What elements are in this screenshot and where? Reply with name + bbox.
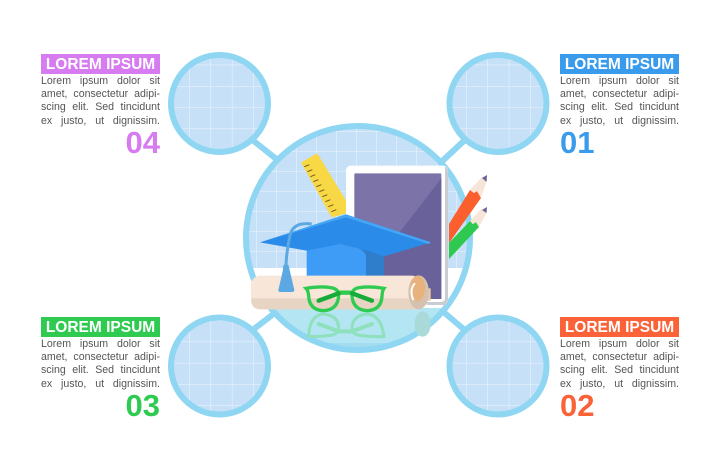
body text 02	[560, 338, 679, 390]
number 03: 03	[126, 388, 160, 423]
body text 02: scing elit. Sed tincidunt	[560, 364, 679, 376]
icon: tablet	[346, 166, 448, 305]
icon: tassel	[278, 264, 294, 292]
glasses reflection	[309, 314, 384, 337]
circle 03	[171, 318, 268, 414]
central circle	[240, 126, 480, 358]
body text 03: ex justo, ut dignissim.	[41, 378, 160, 390]
body text 01: amet, consectetur adipi-	[560, 88, 679, 100]
body text 01: Lorem ipsum dolor sit	[560, 75, 679, 87]
body text 03: amet, consectetur adipi-	[41, 351, 160, 363]
illustration: graduation items	[251, 153, 448, 337]
heading 04: LOREM IPSUM	[46, 56, 155, 73]
number 04: 04	[126, 125, 160, 160]
text block 04	[41, 54, 160, 160]
body text 03: scing elit. Sed tincidunt	[41, 364, 160, 376]
body text 04: amet, consectetur adipi-	[41, 88, 160, 100]
body text 04: Lorem ipsum dolor sit	[41, 75, 160, 87]
heading 02: LOREM IPSUM	[565, 319, 674, 336]
body text 04: ex justo, ut dignissim.	[41, 115, 160, 127]
heading 01: LOREM IPSUM	[565, 56, 674, 73]
body text 01: ex justo, ut dignissim.	[560, 115, 679, 127]
circle 02	[450, 318, 546, 414]
circle 04	[171, 55, 268, 152]
body text 02: amet, consectetur adipi-	[560, 351, 679, 363]
body text 02: Lorem ipsum dolor sit	[560, 338, 679, 350]
body text 02: ex justo, ut dignissim.	[560, 378, 679, 390]
text block 02	[560, 317, 679, 423]
body text 01	[560, 75, 679, 127]
text block 01	[560, 54, 679, 160]
icon: graduation cap	[260, 214, 431, 277]
text block 03	[41, 317, 160, 423]
body text 04: scing elit. Sed tincidunt	[41, 101, 160, 113]
heading 03: LOREM IPSUM	[46, 319, 155, 336]
circle 01	[450, 55, 546, 152]
body text 03: Lorem ipsum dolor sit	[41, 338, 160, 350]
body text 04	[41, 75, 160, 127]
number 01: 01	[560, 125, 594, 160]
body text 01: scing elit. Sed tincidunt	[560, 101, 679, 113]
icon: green pencil	[449, 207, 487, 259]
connector lines	[250, 138, 467, 332]
body text 03	[41, 338, 160, 390]
icon: glasses	[306, 287, 384, 311]
icon: ruler	[301, 153, 347, 217]
number 02: 02	[560, 388, 594, 423]
scroll reflection	[415, 311, 431, 337]
icon: scroll	[251, 275, 431, 309]
icon: orange pencil	[449, 175, 487, 243]
infographic artwork	[168, 52, 550, 418]
